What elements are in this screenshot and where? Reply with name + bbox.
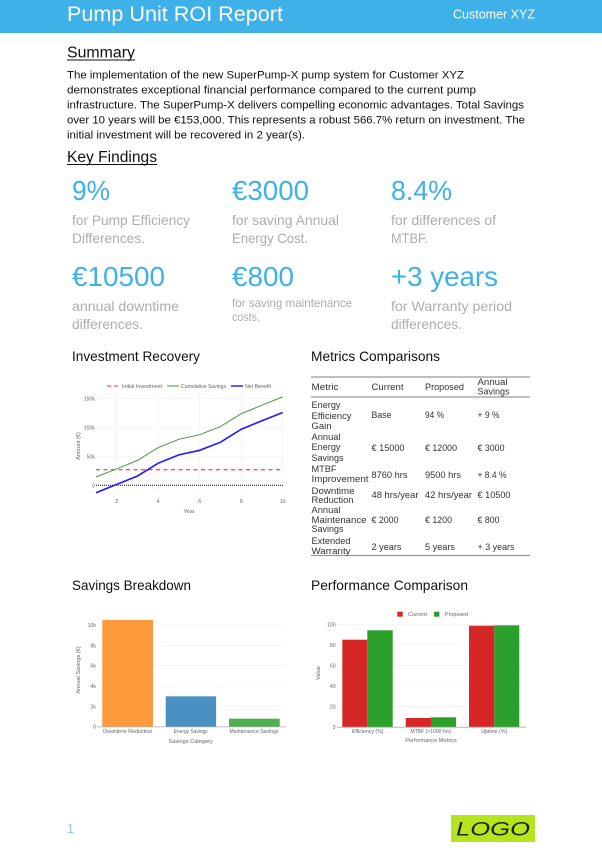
x axis labels: Savings Category <box>169 739 213 745</box>
summary text: over 10 years will be €153,000. This represents a robust 566.7% return on investment. The <box>67 114 525 126</box>
customer name: Customer XYZ <box>453 6 535 22</box>
row: annual energy savings <box>312 432 504 464</box>
row: energy efficiency gain <box>312 400 500 432</box>
metric: downtime: €10500 <box>72 261 165 292</box>
heading: summary: Summary <box>67 45 135 62</box>
y axis ticks: 80 <box>330 643 336 649</box>
x axis ticks: 4 <box>157 499 160 505</box>
summary text: demonstrates exceptional financial performance compared to the current pump <box>67 84 476 96</box>
table header <box>312 377 510 398</box>
y axis ticks: 150k <box>84 397 95 403</box>
table header: Proposed <box>425 382 464 393</box>
x axis labels: Energy Savings <box>174 729 208 735</box>
metric: pump efficiency <box>72 175 190 246</box>
y axis ticks: 100k <box>84 426 95 432</box>
metric: maintenance: €800 <box>232 261 294 292</box>
x axis labels: MTBF (×1000 hrs) <box>410 729 452 735</box>
axis titles: Year <box>183 509 195 515</box>
metric: MTBF <box>391 175 496 246</box>
logo <box>451 815 535 842</box>
legend: Net Benefit <box>245 384 272 390</box>
row: extended warranty: Extended <box>312 536 350 547</box>
bar chart: performance comparison <box>316 612 526 744</box>
y axis ticks: 100 <box>327 622 336 628</box>
metric: downtime <box>72 261 179 332</box>
row: annual energy savings: € 3000 <box>478 443 504 454</box>
row: annual energy savings: Energy <box>312 442 341 453</box>
row: annual energy savings: Annual <box>312 432 340 443</box>
y axis ticks <box>327 622 336 731</box>
row: annual maintenance savings: € 2000 <box>372 515 398 526</box>
metric: energy cost: Energy Cost. <box>232 230 308 246</box>
x axis labels: Uptime (%) <box>481 729 508 735</box>
metric: energy cost: for saving Annual <box>232 212 339 228</box>
net benefit line <box>96 412 283 493</box>
row: energy efficiency gain: 94 % <box>425 410 444 421</box>
summary text <box>67 70 525 142</box>
heading: performance comparison: Performance Comparison <box>311 577 468 593</box>
y axis ticks: 60 <box>330 663 336 669</box>
metric: MTBF: MTBF. <box>391 230 428 246</box>
row: annual energy savings: € 12000 <box>425 443 457 454</box>
metric: MTBF: for differences of <box>391 212 496 228</box>
table: metrics comparison <box>311 377 530 557</box>
y axis ticks <box>88 623 96 731</box>
x axis ticks <box>115 499 286 505</box>
metric: downtime: differences. <box>72 316 143 332</box>
legend: Initial Investment <box>122 384 163 390</box>
row: MTBF improvement: 9500 hrs <box>425 470 461 481</box>
summary text: The implementation of the new SuperPump-X pump system for Customer XYZ <box>67 70 464 82</box>
row: extended warranty: 5 years <box>425 542 455 553</box>
line chart: investment recovery <box>76 384 286 515</box>
row: extended warranty <box>312 536 515 557</box>
zero line <box>96 484 283 486</box>
row: energy efficiency gain: Base <box>372 410 392 421</box>
legend <box>397 612 468 618</box>
x axis labels: Downtime Reduction <box>103 729 152 735</box>
row: energy efficiency gain: Energy <box>312 400 341 411</box>
heading: investment recovery: Investment Recovery <box>72 348 200 364</box>
summary text: initial investment will be recovered in 2 year(s). <box>67 130 305 142</box>
y axis ticks: 10k <box>88 623 96 629</box>
legend <box>107 384 272 390</box>
row: MTBF improvement <box>312 464 507 485</box>
metric: maintenance: for saving maintenance <box>232 296 352 310</box>
row: MTBF improvement: 8760 hrs <box>372 470 408 481</box>
bar: downtime reduction <box>102 620 153 727</box>
row: energy efficiency gain: Efficiency <box>312 411 352 422</box>
row: annual maintenance savings: Maintenance <box>312 515 366 526</box>
metric: warranty <box>391 261 512 332</box>
metric: pump efficiency: for Pump Efficiency <box>72 212 190 228</box>
metric: warranty: +3 years <box>391 261 498 292</box>
y axis ticks: 2k <box>91 704 96 710</box>
row: annual maintenance savings: Savings <box>312 524 344 535</box>
table header: Current <box>372 382 404 393</box>
row: downtime reduction: € 10500 <box>478 490 510 501</box>
bar chart: savings breakdown <box>76 620 286 745</box>
metric: downtime: annual downtime <box>72 298 179 314</box>
bar: energy savings <box>166 696 216 727</box>
y axis ticks: 4k <box>91 684 96 690</box>
metric: warranty: for Warranty period <box>391 298 512 314</box>
x axis labels <box>76 646 279 745</box>
header banner <box>0 0 602 33</box>
axis titles <box>76 432 195 515</box>
y axis ticks: 40 <box>330 684 336 690</box>
row: annual energy savings: € 15000 <box>372 443 404 454</box>
title: Pump Unit ROI Report <box>67 2 283 26</box>
y axis ticks: 0 <box>93 725 96 731</box>
row: downtime reduction: Downtime <box>312 486 354 497</box>
row: MTBF improvement: MTBF <box>312 464 337 475</box>
y axis ticks: 50k <box>87 454 95 460</box>
row: MTBF improvement: + 8.4 % <box>478 470 507 481</box>
axis titles: Amount (€) <box>76 432 82 460</box>
legend: Proposed <box>445 612 468 618</box>
legend: Current <box>408 612 428 618</box>
row: annual maintenance savings: € 800 <box>478 515 500 526</box>
row: extended warranty: + 3 years <box>478 542 515 553</box>
y axis ticks <box>84 397 95 489</box>
metric: pump efficiency: Differences. <box>72 230 145 246</box>
y axis ticks: 0 <box>333 725 336 731</box>
y axis ticks: 6k <box>91 664 96 670</box>
table header: Metric <box>312 382 339 393</box>
initial investment line <box>96 469 283 471</box>
x axis labels: Value <box>316 666 322 680</box>
metric: maintenance <box>232 261 352 324</box>
metric: maintenance: costs. <box>232 310 260 324</box>
summary text: infrastructure. The SuperPump-X delivers compelling economic advantages. Total Savings <box>67 100 524 112</box>
y axis ticks: 0 <box>92 483 95 489</box>
row: downtime reduction: Reduction <box>312 495 354 506</box>
heading: savings breakdown: Savings Breakdown <box>72 577 191 593</box>
row: MTBF improvement: Improvement <box>312 474 369 485</box>
cumulative savings line <box>96 397 283 477</box>
page number: 1 <box>67 822 74 836</box>
x axis labels <box>316 666 508 744</box>
x axis ticks: 10 <box>280 499 286 505</box>
metric: warranty: differences. <box>391 316 462 332</box>
metric: MTBF: 8.4% <box>391 175 452 206</box>
bars: uptime <box>469 625 519 727</box>
logo: LOGO <box>456 820 530 840</box>
metric: pump efficiency: 9% <box>72 175 110 206</box>
heading: metrics comparisons: Metrics Comparisons <box>311 348 440 364</box>
x axis labels: Performance Metrics <box>405 738 457 744</box>
row: annual maintenance savings <box>312 505 500 535</box>
row: extended warranty: 2 years <box>372 542 402 553</box>
x axis labels: Maintenance Savings <box>230 729 279 735</box>
table header: Annual <box>478 377 508 388</box>
row: downtime reduction: 42 hrs/year <box>425 490 473 501</box>
row: extended warranty: Warranty <box>312 546 351 557</box>
row: annual maintenance savings: € 1200 <box>425 515 452 526</box>
row: energy efficiency gain: + 9 % <box>478 410 500 421</box>
row: annual energy savings: Savings <box>312 453 344 464</box>
metric: energy cost: €3000 <box>232 175 309 206</box>
row: downtime reduction <box>312 486 510 506</box>
x axis ticks: 2 <box>115 499 118 505</box>
bars: efficiency <box>342 630 393 727</box>
x axis ticks: 8 <box>240 499 243 505</box>
row: annual maintenance savings: Annual <box>312 505 340 516</box>
x axis ticks: 6 <box>198 499 201 505</box>
legend: Cumulative Savings <box>181 384 226 390</box>
bar: maintenance savings <box>229 719 280 727</box>
row: energy efficiency gain: Gain <box>312 421 332 432</box>
metric: energy cost <box>232 175 339 246</box>
x axis labels: Annual Savings (€) <box>76 646 82 694</box>
panel: key findings metrics <box>72 175 512 332</box>
row: downtime reduction: 48 hrs/year <box>372 490 419 501</box>
heading: key findings: Key Findings <box>67 149 157 166</box>
bars: MTBF <box>406 717 456 727</box>
table header: Savings <box>478 386 510 398</box>
y axis ticks: 8k <box>91 643 96 649</box>
y axis ticks: 20 <box>330 704 336 710</box>
x axis labels: Efficiency (%) <box>352 729 384 735</box>
